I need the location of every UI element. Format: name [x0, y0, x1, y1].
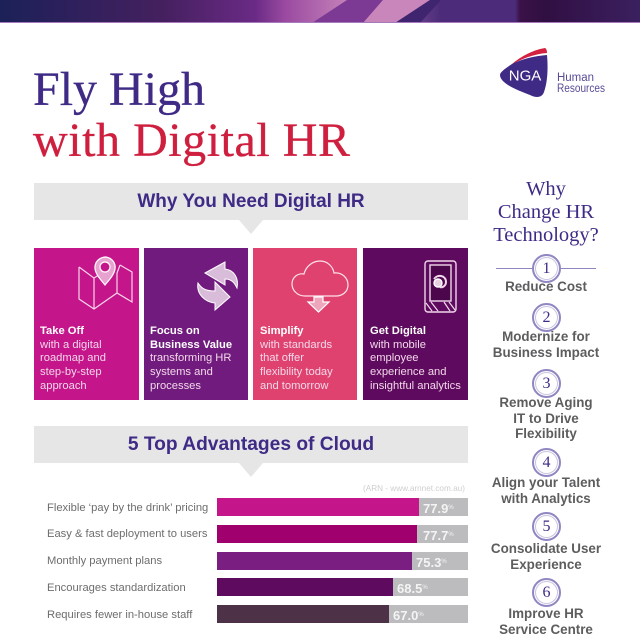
bar chart: [47, 498, 468, 623]
card text: employee: [370, 352, 419, 364]
banner: 5 Top Advantages of Cloud: 5 Top Advantages of Cloud: [128, 434, 374, 455]
header band: [0, 0, 640, 23]
item: Remove Aging IT to Drive Flexibility: Remove Aging: [499, 395, 593, 410]
number 4: [532, 448, 561, 477]
bar 67.0%: 67.0%: [393, 608, 424, 623]
number 6: 6: [542, 584, 550, 601]
icon: mobile phone: [424, 260, 457, 313]
icon: sync arrows: [197, 261, 238, 311]
card text: roadmap and: [40, 352, 106, 364]
card text: [260, 325, 333, 392]
icon: cloud download: [291, 260, 349, 313]
banner: Why You Need Digital HR: Why You Need Digital HR: [137, 191, 365, 212]
number 4: 4: [542, 454, 550, 471]
card text: Get Digital: [370, 325, 426, 337]
item: Consolidate User Experience: Experience: [510, 556, 582, 572]
card text: flexibility today: [260, 366, 333, 378]
card text: that offer: [260, 352, 304, 364]
bar 75.3%: [217, 552, 468, 570]
logo: NGA Human Resources: NGA: [509, 68, 541, 84]
card text: insightful analytics: [370, 380, 461, 392]
row label: Monthly payment plans: [47, 555, 162, 567]
item: Modernize for Business Impact: Business Impact: [493, 344, 599, 360]
card text: and tomorrow: [260, 380, 328, 392]
row label: Requires fewer in-house staff: [47, 609, 192, 621]
card: Take Off: [34, 248, 139, 400]
icon: map with pin: [78, 256, 133, 310]
card text: [370, 325, 461, 392]
card text: transforming HR: [150, 352, 231, 364]
item: Align your Talent with Analytics: Align your Talent: [492, 475, 600, 490]
title: with Digital HR: [33, 114, 351, 167]
row label: Easy & fast deployment to users: [47, 528, 207, 540]
row label: Encourages standardization: [47, 582, 186, 594]
card text: Focus on: [150, 325, 200, 337]
item: Remove Aging IT to Drive Flexibility: Flexibility: [515, 426, 577, 441]
card: Get Digital: [363, 248, 468, 400]
item: Align your Talent with Analytics: with Analytics: [501, 490, 591, 506]
number 1: [532, 254, 561, 283]
item: Reduce Cost: Reduce Cost: [505, 279, 587, 294]
number 6: [532, 578, 561, 607]
item: Align your Talent with Analytics: [492, 475, 600, 506]
number 5: 5: [542, 518, 550, 535]
sidebar heading: Why: [526, 178, 566, 200]
card text: [40, 325, 106, 392]
banner: Why You Need Digital HR: [34, 183, 468, 220]
sidebar heading: [493, 178, 599, 246]
card text: experience and: [370, 366, 447, 378]
bar 75.3%: 75.3%: [416, 555, 447, 570]
number 3: 3: [542, 375, 550, 392]
card: Simplify: [253, 248, 357, 400]
card text: systems and: [150, 366, 213, 378]
number 2: [532, 303, 561, 332]
card text: with mobile: [370, 339, 426, 351]
item: Consolidate User Experience: Consolidate User: [491, 541, 601, 556]
title: Fly High: [33, 63, 205, 116]
number 2: 2: [542, 309, 550, 326]
bar 77.9%: [217, 498, 468, 516]
card text: with a digital: [40, 339, 102, 351]
row label: Flexible ‘pay by the drink’ pricing: [47, 502, 208, 514]
logo: NGA Human Resources: [500, 48, 605, 97]
title: [32, 63, 351, 167]
number 5: [532, 512, 561, 541]
bar 68.5%: [217, 578, 468, 596]
card text: [150, 325, 232, 392]
item: Modernize for Business Impact: [493, 329, 600, 360]
banner pointer: [239, 463, 263, 477]
bar 77.7%: 77.7%: [423, 528, 454, 543]
banner: 5 Top Advantages of Cloud: [34, 426, 468, 463]
sidebar heading: Technology?: [493, 224, 599, 246]
item: Improve HR Service Centre: Improve HR: [508, 606, 584, 621]
card text: Take Off: [40, 325, 84, 337]
item: Remove Aging IT to Drive Flexibility: [499, 395, 593, 441]
bar 77.7%: [217, 525, 468, 543]
card text: processes: [150, 380, 201, 392]
card text: with standards: [260, 339, 332, 351]
item: Consolidate User Experience: [491, 541, 601, 572]
bar 77.9%: 77.9%: [423, 501, 454, 516]
banner pointer: [239, 220, 263, 234]
number 1: 1: [542, 260, 550, 277]
item: Remove Aging IT to Drive Flexibility: IT to Drive: [513, 410, 579, 426]
card text: approach: [40, 380, 87, 392]
source note: (ARN - www.arnnet.com.au): [363, 484, 465, 493]
card: Focus on Business Value: [144, 248, 248, 400]
bar 68.5%: 68.5%: [397, 581, 428, 596]
card text: Simplify: [260, 325, 304, 337]
item: Improve HR Service Centre: [499, 606, 593, 636]
item: Modernize for Business Impact: Modernize for: [502, 329, 590, 344]
logo: NGA Human Resources: Human: [557, 72, 594, 84]
card text: Business Value: [150, 339, 232, 351]
item: Improve HR Service Centre: Service Centre: [499, 622, 593, 636]
card text: step-by-step: [40, 366, 102, 378]
bar 67.0%: [217, 605, 468, 623]
number 3: [532, 369, 561, 398]
sidebar heading: Change HR: [498, 201, 594, 223]
